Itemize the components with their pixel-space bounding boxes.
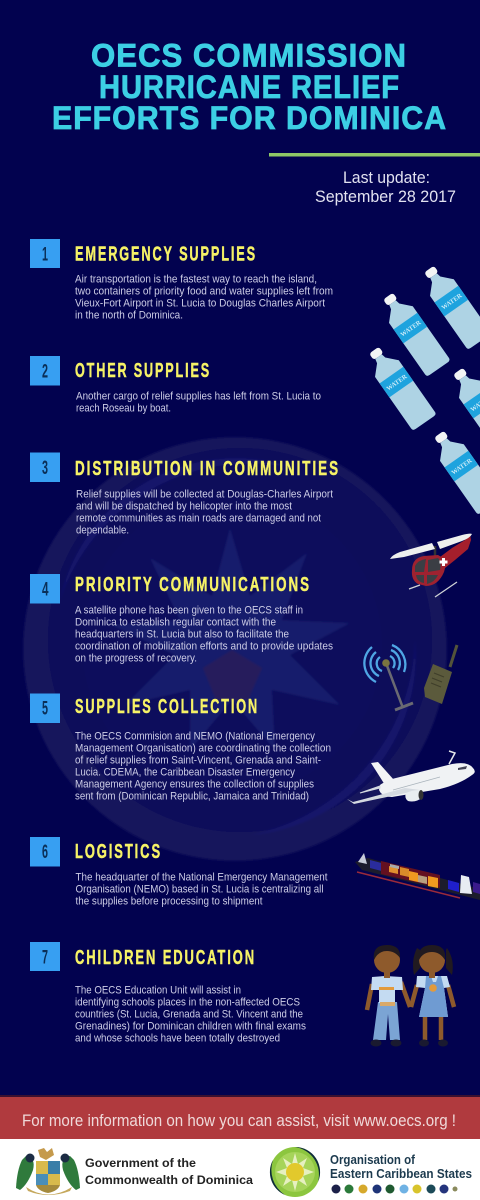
section 3: distribution in communities: Relief supplies will be collected at Douglas-Charles Airport [76, 488, 333, 500]
last update date: September 28 2017 [315, 187, 456, 206]
last update date: Last update: [343, 168, 430, 187]
section 6: logistics: the supplies before processing to shipment [76, 896, 262, 908]
section 5: supplies collection: SUPPLIES COLLECTION [75, 695, 259, 718]
section 1: emergency supplies: in the north of Dominica. [75, 310, 183, 322]
logo: OECS sun emblem [270, 1147, 320, 1197]
section 6: logistics: LOGISTICS [75, 840, 162, 863]
footer band: call to action [0, 1095, 480, 1139]
section 5: supplies collection: Management Agency ensures the collection of supplies [75, 778, 315, 790]
section 7: children education: and whose schools have been totally destroyed [75, 1032, 280, 1044]
section 1: emergency supplies: Air transportation is the fastest way to reach the island, [75, 274, 317, 286]
section 6: logistics: Organisation (NEMO) based in St. Lucia is centralizing all [76, 884, 324, 896]
text: Organisation of Eastern Caribbean States: Eastern Caribbean States [330, 1167, 472, 1181]
logo: Dominica coat of arms [16, 1148, 80, 1195]
icon: helicopter [390, 534, 472, 597]
icon: walkie-talkie [424, 645, 457, 704]
last update date [315, 168, 456, 206]
text: Organisation of Eastern Caribbean States [330, 1153, 472, 1181]
icon: two children holding hands [367, 945, 454, 1046]
section 2: other supplies: Another cargo of relief supplies has left from St. Lucia to [76, 390, 321, 402]
title [52, 38, 447, 136]
section 3: distribution in communities: 3 [42, 458, 48, 479]
text: Government of the Commonwealth of Dominica: Commonwealth of Dominica [85, 1173, 253, 1187]
section 7: children education: The OECS Education Unit will assist in [75, 984, 241, 996]
section 7: children education: 7 [42, 948, 48, 968]
section 3: distribution in communities: DISTRIBUTION IN COMMUNITIES [75, 457, 340, 480]
section 4: priority communications: Dominica to establish regular contact with the [75, 616, 276, 628]
section 1: emergency supplies: EMERGENCY SUPPLIES [75, 242, 257, 266]
section 3: distribution in communities [30, 452, 340, 536]
icon: antenna with signal waves [364, 645, 413, 710]
section 4: priority communications [30, 573, 334, 664]
footer: logo strip [0, 1139, 480, 1200]
section 5: supplies collection: Management Organisation) are coordinating the collection [75, 742, 331, 754]
section 2: other supplies [30, 356, 321, 414]
section 7: children education [30, 942, 307, 1044]
section 4: priority communications: 4 [42, 580, 49, 600]
icon: water bottles: WATER [385, 373, 409, 392]
section 5: supplies collection: of relief supplies from Saint-Vincent, Grenada and Saint- [75, 754, 321, 766]
section 1: emergency supplies: 1 [42, 244, 48, 266]
section 3: distribution in communities: and will be dispatched by helicopter into the most [76, 500, 292, 512]
text: Organisation of Eastern Caribbean States: Organisation of [330, 1153, 416, 1167]
section 5: supplies collection: The OECS Commision and NEMO (National Emergency [75, 730, 316, 742]
section 4: priority communications: A satellite phone has been given to the OECS staff in [75, 604, 303, 616]
section 4: priority communications: on the progress of recovery. [75, 652, 197, 664]
text: Government of the Commonwealth of Dominica [85, 1156, 253, 1187]
title: EFFORTS FOR DOMINICA [52, 100, 447, 136]
icon: water bottles: WATER [399, 319, 423, 338]
section 2: other supplies: OTHER SUPPLIES [75, 359, 211, 382]
icon: water bottles: WATER [450, 457, 474, 476]
section 1: emergency supplies: two containers of priority food and water supplies left from [75, 286, 333, 298]
section 5: supplies collection: 5 [42, 698, 48, 720]
section 7: children education: countries (St. Lucia, Grenada and St. Vincent and the [75, 1008, 303, 1020]
section 7: children education: CHILDREN EDUCATION [75, 946, 256, 969]
member state flags [332, 1184, 458, 1194]
background watermark: OECS emblem [23, 437, 447, 861]
section 6: logistics [30, 837, 328, 908]
section 1: emergency supplies [30, 239, 333, 322]
icon: cargo ship [355, 853, 480, 900]
section 4: priority communications: coordination of mobilization efforts and to provide updates [75, 640, 334, 652]
title: OECS COMMISSION [91, 38, 407, 74]
section 7: children education: identifying schools places in the non-affected OECS [75, 996, 300, 1008]
section 3: distribution in communities: dependable. [76, 524, 129, 536]
section 6: logistics: The headquarter of the National Emergency Management [76, 872, 328, 884]
section 5: supplies collection: sent from (Dominican Republic, Jamaica and Trinidad) [75, 790, 309, 802]
icon: water bottles [362, 261, 480, 515]
section 4: priority communications: PRIORITY COMMUNICATIONS [75, 573, 311, 596]
section 1: emergency supplies: Vieux-Fort Airport in St. Lucia to Douglas Charles Airport [75, 298, 325, 310]
section 2: other supplies: 2 [42, 362, 48, 382]
text: Government of the Commonwealth of Dominica: Government of the [85, 1156, 196, 1170]
icon: water bottles: WATER [440, 292, 464, 311]
section 5: supplies collection [30, 694, 331, 802]
section 2: other supplies: reach Roseau by boat. [76, 402, 171, 414]
section 4: priority communications: headquarters in St. Lucia but also to facilitate the [75, 628, 289, 640]
icon: airplane [347, 751, 475, 804]
section 6: logistics: 6 [42, 842, 48, 863]
title: HURRICANE RELIEF [99, 69, 400, 105]
section 7: children education: Grenadines) for Dominican children with final exams [75, 1020, 307, 1032]
section 3: distribution in communities: remote communities as main roads are damaged and not [76, 512, 321, 524]
title underline [269, 153, 480, 156]
section 5: supplies collection: Lucia. CDEMA, the Caribbean Disaster Emergency [75, 766, 296, 778]
